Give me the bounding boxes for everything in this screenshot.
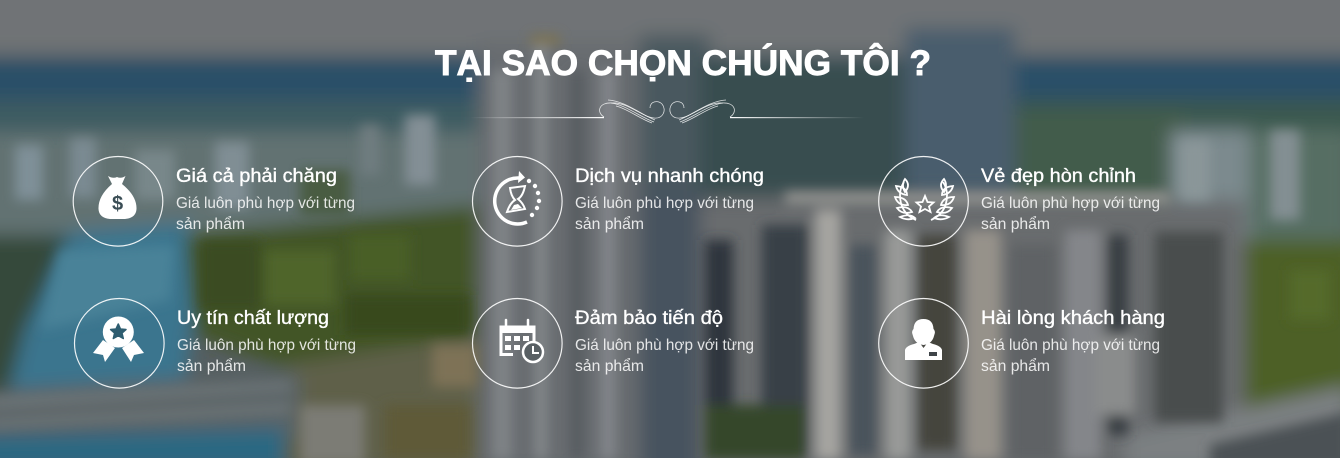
description: sản phẩm [981, 357, 1050, 375]
description: sản phẩm [981, 215, 1050, 233]
left suburbs [15, 145, 43, 200]
icon: money bag [73, 156, 163, 246]
central tower [492, 70, 512, 459]
description: sản phẩm [177, 357, 246, 375]
description: sản phẩm [575, 357, 644, 375]
description: Giá luôn phù hợp với từng [176, 195, 355, 212]
feature: Vẻ đẹp hòn chỉnh [879, 156, 1160, 246]
icon: hourglass with circular arrow [472, 156, 562, 246]
feature: Giá cả phải chăng [73, 156, 355, 246]
description: Giá luôn phù hợp với từng [575, 195, 754, 212]
description: Giá luôn phù hợp với từng [981, 337, 1160, 354]
icon: laurel and star [879, 156, 968, 246]
right building [705, 240, 733, 455]
heading: Uy tín chất lượng [177, 308, 329, 329]
feature: Dịch vụ nhanh chóng [472, 156, 764, 246]
heading: Giá cả phải chăng [176, 166, 337, 187]
icon: calendar with clock [472, 298, 562, 388]
heading: Vẻ đẹp hòn chỉnh [981, 166, 1136, 187]
description: Giá luôn phù hợp với từng [981, 195, 1160, 212]
title ornament [470, 100, 864, 123]
icon: award ribbon [74, 298, 164, 388]
heading: Đảm bảo tiến độ [575, 308, 723, 329]
icon: money bag: $ [112, 193, 123, 215]
heading: Hài lòng khách hàng [981, 308, 1165, 329]
title: TẠI SAO CHỌN CHÚNG TÔI ? [435, 43, 931, 83]
feature: Hài lòng khách hàng [879, 298, 1165, 388]
icon: staff person [879, 298, 968, 388]
heading: Dịch vụ nhanh chóng [575, 166, 764, 187]
description: Giá luôn phù hợp với từng [177, 337, 356, 354]
description: sản phẩm [575, 215, 644, 233]
description: Giá luôn phù hợp với từng [575, 337, 754, 354]
feature: Uy tín chất lượng [74, 298, 356, 388]
feature: Đảm bảo tiến độ [472, 298, 754, 388]
description: sản phẩm [176, 215, 245, 233]
